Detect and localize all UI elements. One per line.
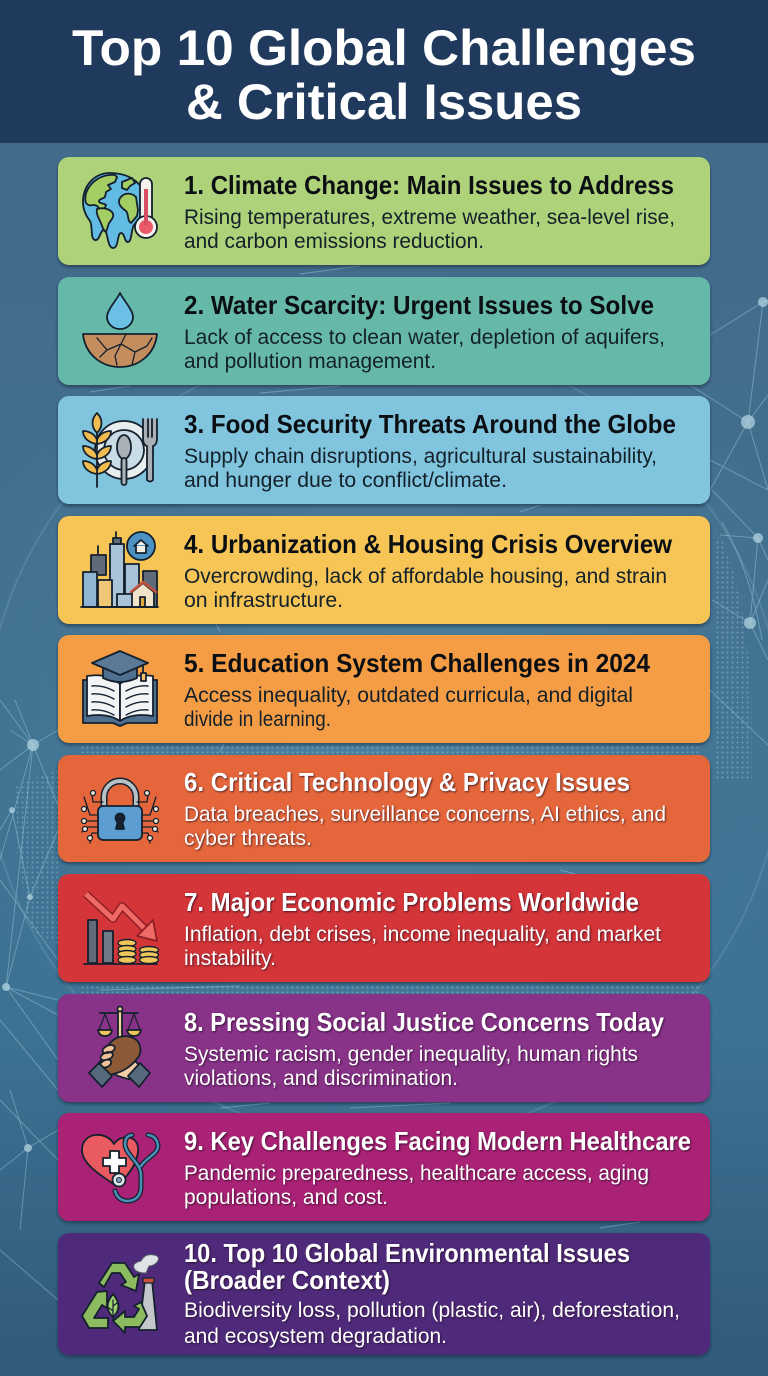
text block [184,767,666,850]
text block: 10. Top 10 Global Environmental Issues [184,1238,630,1268]
text block: violations, and discrimination. [184,1067,458,1090]
icon: open book and graduation cap [83,651,157,726]
header band [0,0,768,143]
text block: 2. Water Scarcity: Urgent Issues to Solve [184,290,654,320]
icon: padlock with circuits [82,781,158,843]
panel: 9 healthcare [58,1113,710,1221]
text block: 7. Major Economic Problems Worldwide [184,887,639,917]
text block: and hunger due to conflict/climate. [184,469,507,492]
text block: cyber threats. [184,827,312,850]
text block: Lack of access to clean water, depletion of aquifers, [184,326,665,349]
text block [184,887,661,970]
panel: 5 education [58,635,710,743]
text block: Inflation, debt crises, income inequality, and market [184,923,661,946]
panel: 8 social justice [58,994,710,1102]
text block [184,290,665,373]
panel: 4 urbanization [58,516,710,624]
icon: heart and stethoscope [82,1135,158,1201]
title [72,20,696,130]
text block [184,1126,691,1209]
text block: and carbon emissions reduction. [184,230,484,253]
text block: Systemic racism, gender inequality, human rights [184,1043,638,1066]
text block: populations, and cost. [184,1186,388,1209]
text block [184,648,651,731]
text block: 6. Critical Technology & Privacy Issues [184,767,630,797]
text block: 8. Pressing Social Justice Concerns Today [184,1007,664,1037]
text block: Data breaches, surveillance concerns, AI ethics, and [184,803,666,826]
text block [184,1007,664,1090]
text block [184,529,673,612]
text block: Access inequality, outdated curricula, and digital [184,684,633,707]
icon: water drop and cracked earth [83,293,157,367]
text block: and pollution management. [184,350,436,373]
text block: (Broader Context) [184,1265,390,1295]
text block: on infrastructure. [184,589,343,612]
icon: falling chart and coins [84,894,158,964]
text block [184,170,675,253]
panel: 1 climate change [58,157,710,265]
text block: 9. Key Challenges Facing Modern Healthcare [184,1126,691,1156]
text block: Supply chain disruptions, agricultural sustainability, [184,445,657,468]
icon: wheat, plate, spoon and fork [83,413,157,487]
text block: Pandemic preparedness, healthcare access, aging [184,1162,649,1185]
panel: 10 environmental issues [58,1233,710,1355]
text block: 3. Food Security Threats Around the Globe [184,409,676,439]
panel: 3 food security [58,396,710,504]
title: Top 10 Global Challenges [72,20,696,76]
text block: 4. Urbanization & Housing Crisis Overview [184,529,673,559]
text block: and ecosystem degradation. [184,1325,447,1348]
text block [184,1238,680,1348]
text block: 1. Climate Change: Main Issues to Address [184,170,674,200]
icon: scales and clasped hands [89,1006,150,1087]
text block: Rising temperatures, extreme weather, sea-level rise, [184,206,675,229]
icon: recycling symbol, leaf and factory [82,1255,158,1333]
text block: divide in learning. [184,708,331,731]
panel: 2 water scarcity [58,277,710,385]
text block: 5. Education System Challenges in 2024 [184,648,651,678]
panel: 6 technology and privacy [58,755,710,862]
text block: Biodiversity loss, pollution (plastic, air), deforestation, [184,1299,680,1322]
text block [184,409,676,492]
icon: city skyline and house bubble [81,532,158,607]
text block: Overcrowding, lack of affordable housing, and strain [184,565,667,588]
panel: 7 economic problems [58,874,710,982]
icon: melting globe and thermometer [83,173,157,248]
text block: instability. [184,947,276,970]
title: & Critical Issues [186,74,582,130]
